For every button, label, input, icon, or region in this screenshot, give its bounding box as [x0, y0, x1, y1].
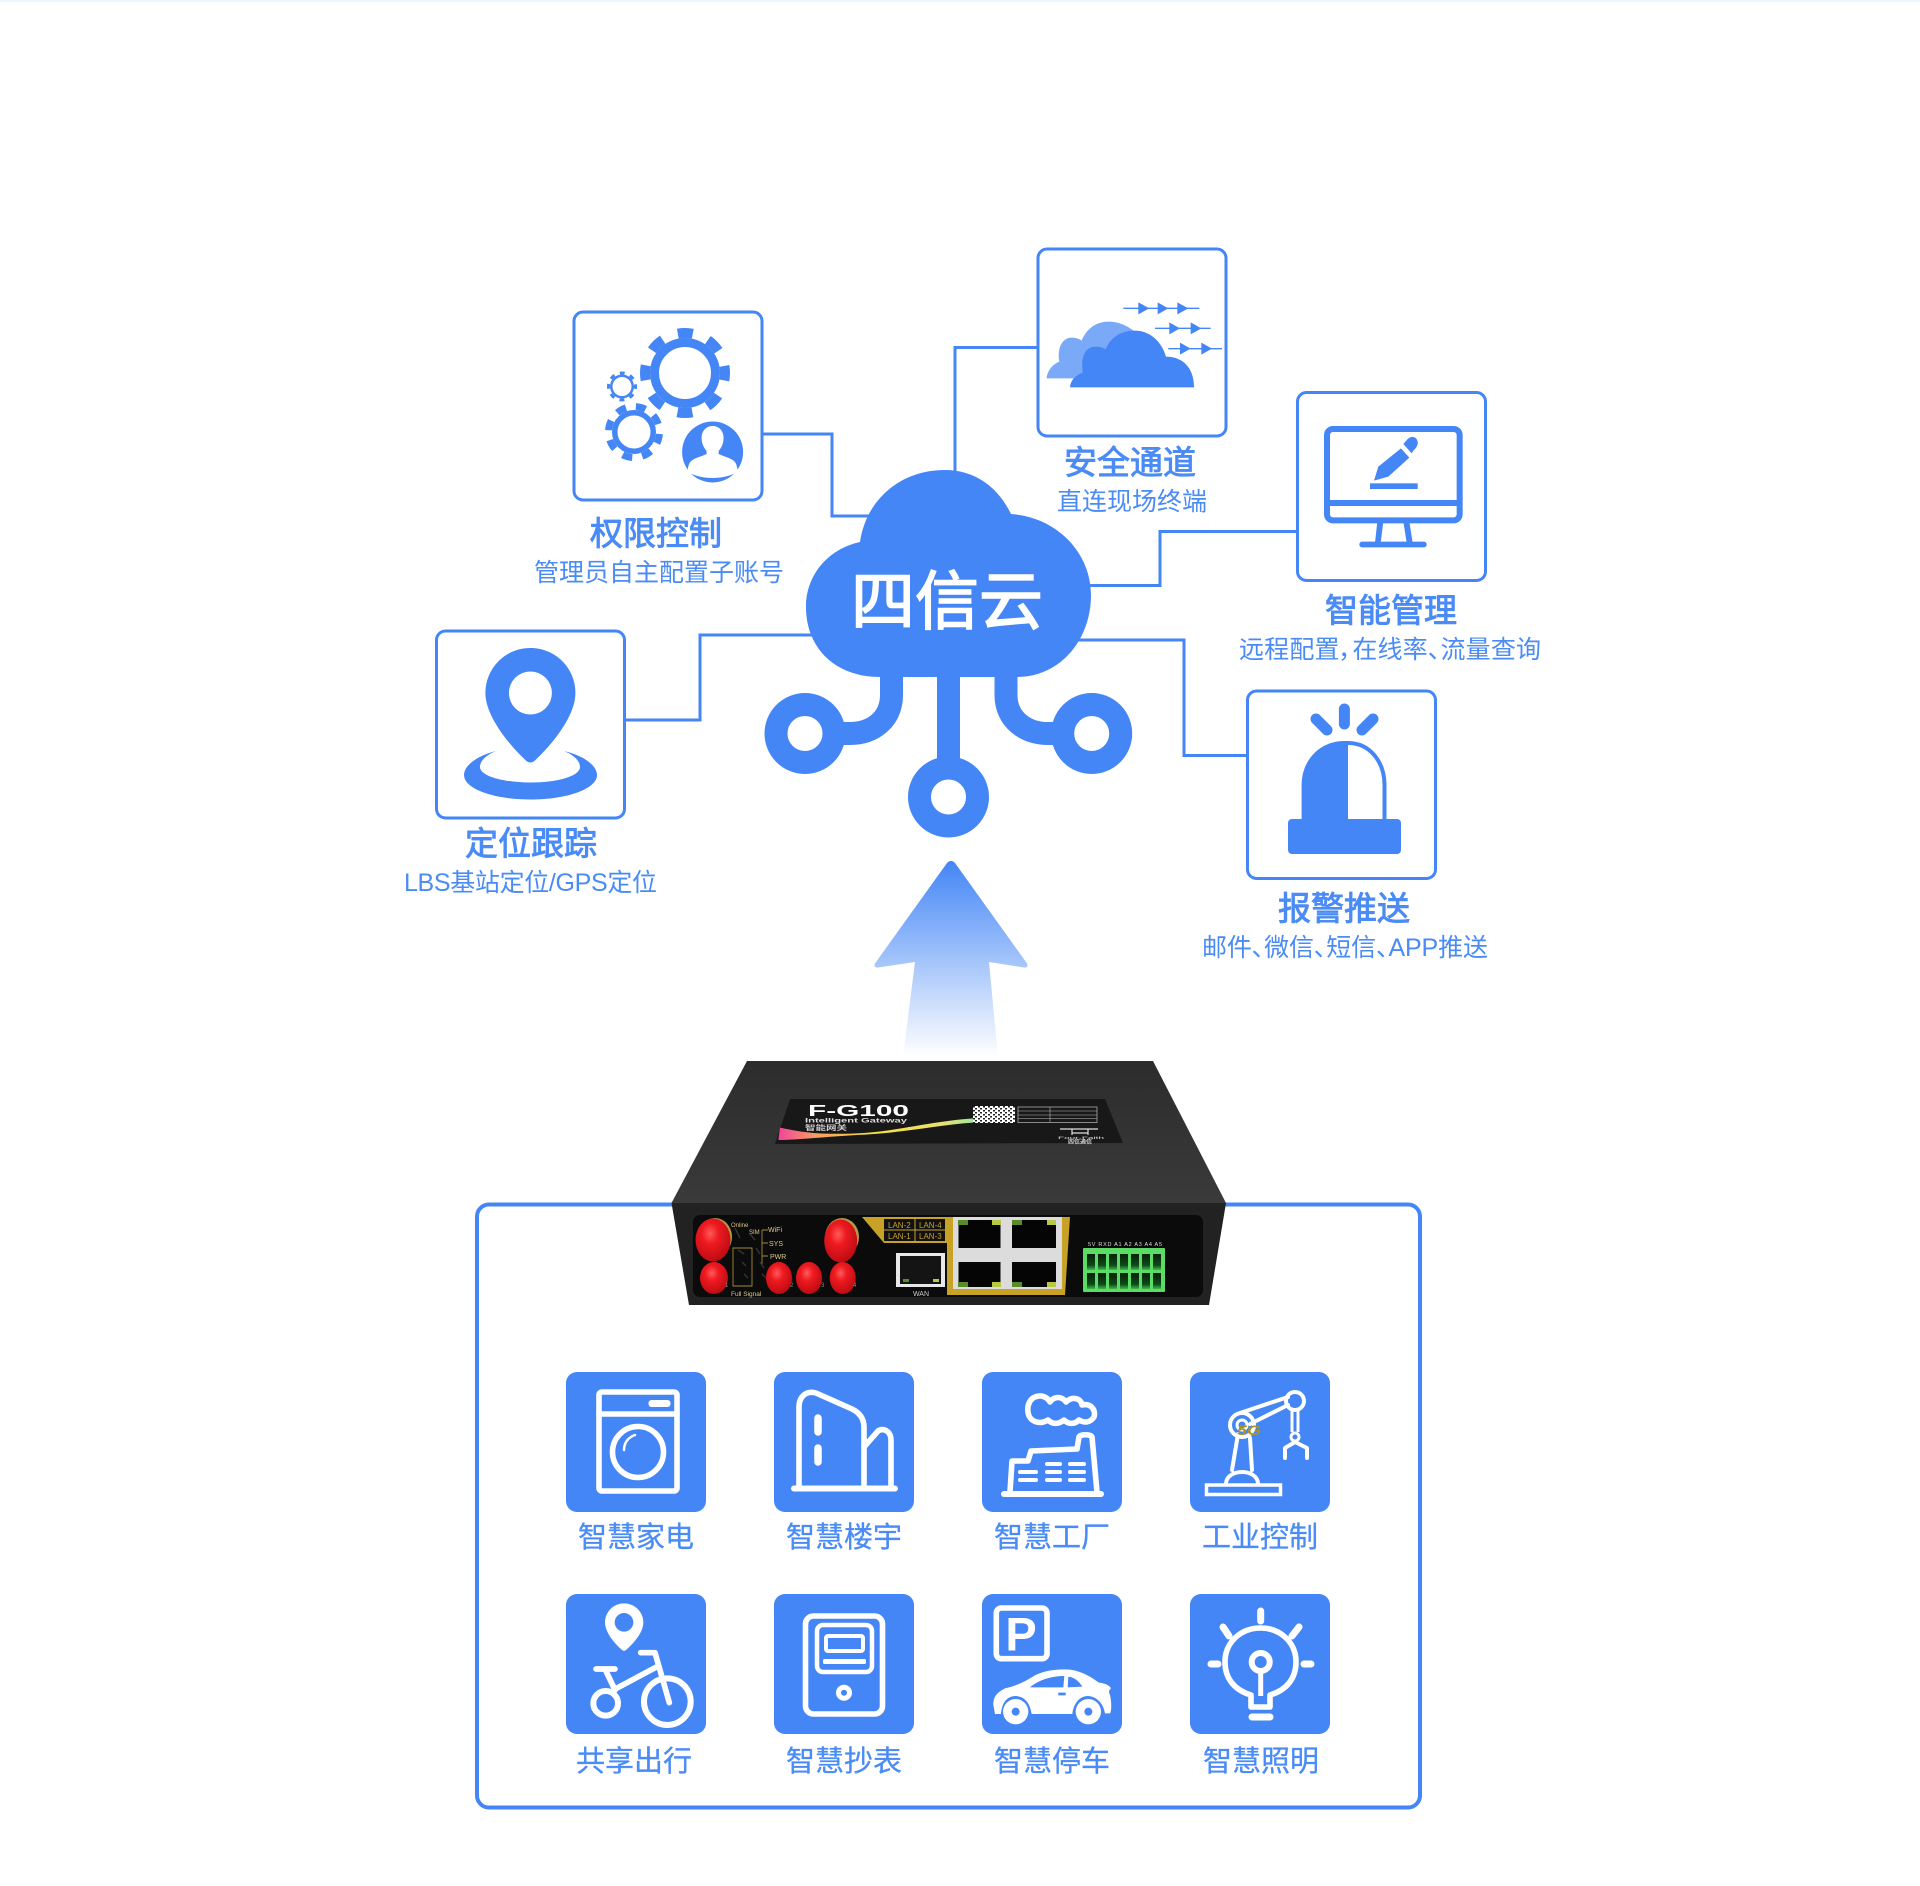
box	[436, 631, 624, 818]
tile: smart factory	[982, 1372, 1122, 1554]
cloud shape	[806, 470, 1091, 677]
background	[566, 1372, 706, 1512]
LED labels: SIM	[749, 1230, 760, 1236]
LED labels: Full Signal	[731, 1291, 762, 1298]
LAN labels: LAN-3	[919, 1232, 942, 1241]
background	[982, 1594, 1122, 1734]
icon: location pin	[464, 648, 597, 800]
front panel	[693, 1215, 1203, 1297]
LED labels: 3	[821, 1283, 825, 1289]
box	[1298, 392, 1486, 580]
connector: positioning to cloud	[625, 635, 815, 720]
panel: positioning	[404, 631, 657, 897]
tile: smart appliance	[566, 1372, 706, 1554]
WAN port: WAN	[913, 1291, 929, 1298]
LED labels: WiFi	[768, 1227, 782, 1234]
heading: 报警推送	[1278, 890, 1410, 927]
green terminal block: 5V RXD A1 A2 A3 A4 A5	[1088, 1242, 1162, 1248]
sticker	[775, 1099, 1123, 1146]
tile: smart metering	[774, 1594, 914, 1778]
sticker: 四信通信	[1068, 1138, 1092, 1146]
icon: clouds with arrows	[1047, 302, 1222, 387]
heading: 安全通道	[1064, 444, 1196, 481]
panel: permission control	[534, 312, 784, 587]
background	[774, 1372, 914, 1512]
background	[982, 1372, 1122, 1512]
label: 智慧工厂	[994, 1521, 1110, 1554]
sticker: 智能网关	[805, 1123, 847, 1132]
description: LBS基站定位/GPS定位	[404, 869, 657, 897]
LAN labels	[862, 1217, 947, 1243]
label: 智慧家电	[578, 1521, 694, 1554]
icon: washing machine	[599, 1392, 677, 1491]
panel: alarm push	[1202, 691, 1488, 962]
LED labels: Online	[731, 1223, 749, 1229]
icon: factory	[1004, 1396, 1101, 1494]
label: 共享出行	[576, 1745, 692, 1778]
tile: smart lighting	[1190, 1594, 1330, 1778]
top edge strip	[0, 0, 1920, 2]
box	[1038, 249, 1226, 436]
heading: 智能管理	[1325, 592, 1457, 629]
circuit branches	[820, 670, 1075, 770]
panel: secure channel	[1038, 249, 1226, 516]
central cloud with circuit nodes	[776, 470, 1121, 826]
description: 邮件、微信、短信、APP推送	[1202, 934, 1488, 962]
connector: smart management to cloud	[1085, 532, 1297, 586]
device front face	[672, 1203, 1226, 1305]
background	[774, 1594, 914, 1734]
connector: permission control to cloud	[762, 434, 870, 516]
box	[1248, 691, 1436, 878]
description: 直连现场终端	[1057, 488, 1207, 516]
icon: building	[794, 1392, 895, 1488]
WAN port	[896, 1253, 945, 1298]
heading: 权限控制	[590, 515, 722, 552]
icon: alarm beacon	[1288, 709, 1401, 854]
node left	[776, 704, 834, 762]
green terminal block	[1083, 1242, 1165, 1292]
LED labels: 2	[790, 1283, 794, 1289]
tile: shared mobility	[566, 1594, 706, 1778]
LED labels: 4	[853, 1283, 857, 1289]
icon: robot arm	[1206, 1392, 1307, 1494]
description: 管理员自主配置子账号	[534, 559, 784, 587]
tile: industrial control	[1190, 1372, 1330, 1554]
icon: parking and car: P	[1005, 1608, 1037, 1661]
background	[1190, 1372, 1330, 1512]
label: 智慧停车	[994, 1745, 1110, 1778]
upward arrow	[875, 861, 1027, 1057]
icon: bicycle with pin	[593, 1603, 691, 1725]
label: 工业控制	[1202, 1521, 1318, 1554]
LED labels: PWR	[770, 1254, 786, 1261]
device top face	[672, 1061, 1226, 1203]
cloud title: 四信云	[851, 566, 1043, 638]
icon: light bulb	[1211, 1611, 1311, 1717]
LAN labels: LAN-1	[888, 1232, 911, 1241]
device: F-G100 gateway	[672, 1061, 1226, 1305]
icon: parking and car	[993, 1608, 1111, 1724]
sticker: F-G100	[808, 1103, 909, 1120]
LED labels	[725, 1223, 857, 1298]
node right	[1063, 704, 1121, 762]
LED labels: 1	[725, 1283, 729, 1289]
sticker: Intelligent Gateway	[805, 1118, 908, 1124]
background	[566, 1594, 706, 1734]
background	[1190, 1594, 1330, 1734]
panel: smart management	[1239, 392, 1541, 664]
tile: smart building	[774, 1372, 914, 1554]
connector: secure channel to cloud	[955, 348, 1037, 475]
label: 智慧抄表	[786, 1745, 902, 1778]
mark: gold 5G: 5G	[1237, 1422, 1261, 1438]
antennas	[696, 1218, 859, 1294]
description: 远程配置，在线率、流量查询	[1239, 636, 1541, 664]
tile: smart parking	[982, 1594, 1122, 1778]
panel: application scenarios frame	[477, 1204, 1420, 1808]
box	[574, 312, 762, 500]
icon: meter	[806, 1616, 882, 1714]
sticker: Four-Faith	[1058, 1135, 1104, 1140]
label: 智慧楼宇	[786, 1521, 902, 1554]
icon: gears and user	[603, 333, 743, 482]
LAN ports	[947, 1217, 1070, 1295]
label: 智慧照明	[1203, 1745, 1319, 1778]
icon: monitor with pen	[1327, 429, 1460, 547]
node center	[920, 768, 978, 826]
LED labels: SYS	[769, 1241, 783, 1248]
LAN labels: LAN-4	[919, 1221, 942, 1230]
heading: 定位跟踪	[465, 825, 597, 862]
connector: alarm to cloud	[1075, 640, 1247, 756]
LAN labels: LAN-2	[888, 1221, 911, 1230]
